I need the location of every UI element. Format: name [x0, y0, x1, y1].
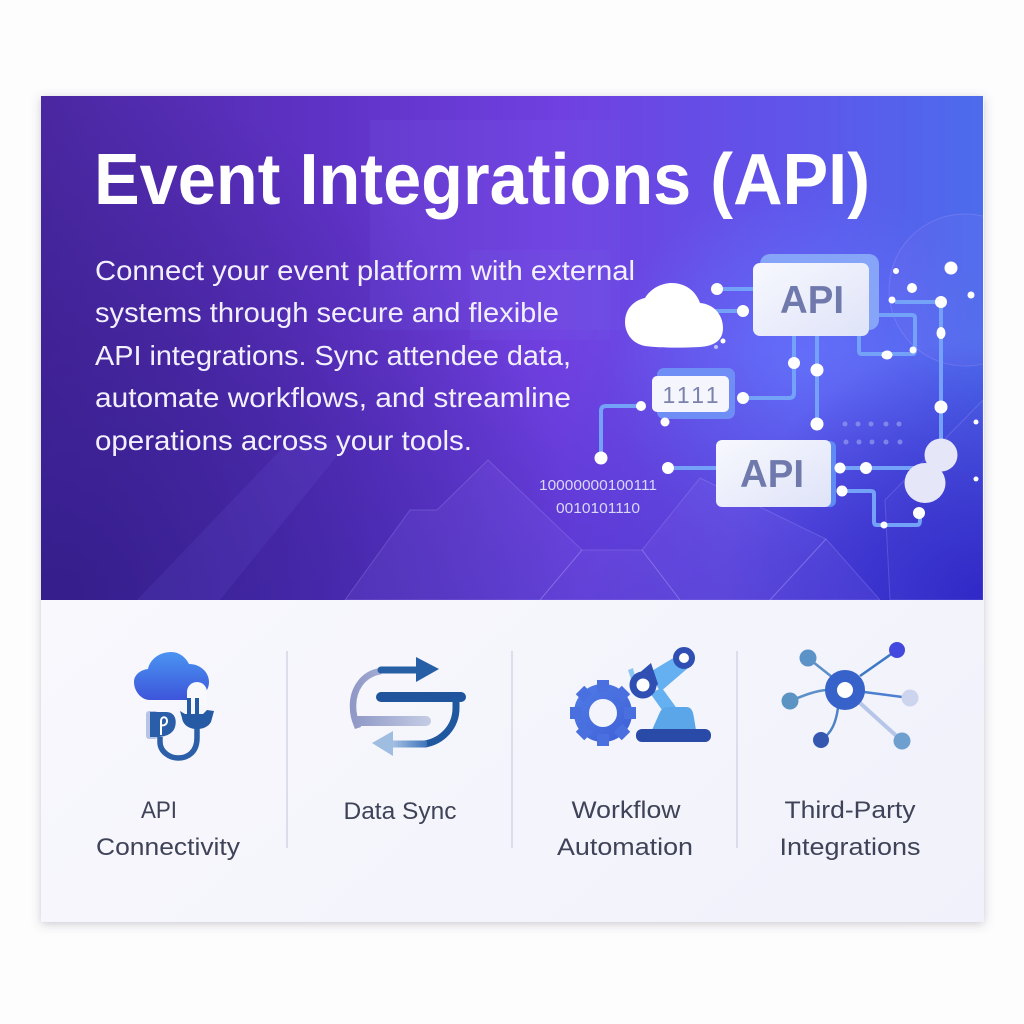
- dot matrix: [842, 422, 902, 444]
- title: Event Integrations (API): [94, 140, 870, 220]
- feature: API Connectivity: [96, 652, 240, 861]
- binary card: 1111: [662, 382, 718, 408]
- api card top: API: [780, 279, 844, 322]
- description text: systems through secure and flexible: [95, 297, 559, 328]
- binary text: 0010101110: [556, 500, 640, 517]
- decorative hub spheres: [904, 438, 958, 503]
- api card bottom: [716, 440, 836, 507]
- label: API: [141, 797, 177, 824]
- icon: cloud: [625, 283, 723, 348]
- label: Third-Party: [784, 797, 916, 824]
- icon: gear and robot arm: [570, 650, 711, 746]
- description text: Connect your event platform with external: [95, 255, 635, 286]
- panel: feature row: [96, 642, 920, 861]
- feature: Workflow Automation: [557, 650, 711, 861]
- label: Data Sync: [344, 798, 456, 825]
- binary text: 10000000100111: [539, 477, 657, 494]
- description text: automate workflows, and streamline: [95, 382, 571, 413]
- icon: cloud with plug: [134, 652, 214, 758]
- circuit nodes: [594, 262, 978, 528]
- api card top: [753, 254, 879, 336]
- binary text: [539, 477, 657, 517]
- infographic card: [41, 96, 1024, 922]
- circuit diagram: [539, 254, 978, 528]
- api card bottom: API: [740, 453, 804, 496]
- description text: API integrations. Sync attendee data,: [95, 340, 571, 371]
- feature: Third-Party Integrations: [780, 642, 920, 861]
- feature: API Connectivity: Connectivity: [96, 834, 240, 861]
- description text: operations across your tools.: [95, 425, 472, 456]
- circuit lines: [601, 289, 941, 525]
- binary card: [652, 368, 735, 419]
- icon: sync arrows: [353, 657, 461, 756]
- feature: Third-Party Integrations: Integrations: [780, 834, 920, 861]
- dividers: [287, 651, 737, 848]
- description text: [95, 255, 635, 456]
- label: Workflow: [572, 797, 681, 824]
- feature: Workflow Automation: Automation: [557, 834, 693, 861]
- panel: header banner: [41, 96, 1024, 600]
- icon: network hub: [782, 642, 918, 750]
- feature: Data Sync: [344, 657, 461, 825]
